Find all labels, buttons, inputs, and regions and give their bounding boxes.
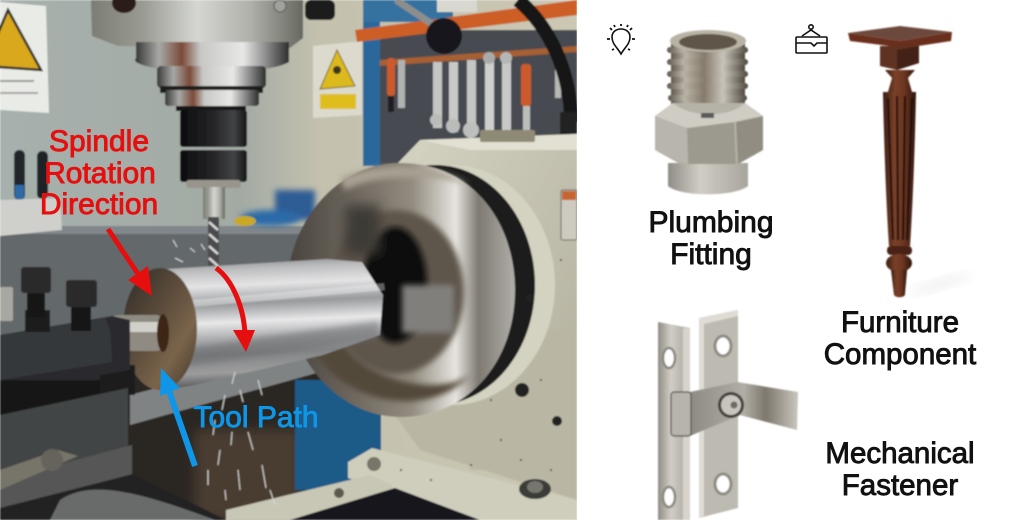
label: furniture component [824,306,976,371]
label: mechanical fastener: Fastener [842,469,958,502]
label: plumbing fitting [648,206,774,271]
icon: box with hook [796,25,827,53]
product: plumbing fitting [655,30,763,194]
label: spindle rotation direction: Rotation [44,157,156,190]
product: mechanical hinge fastener [658,310,798,520]
label: plumbing fitting: Fitting [670,238,752,271]
label: furniture component: Component [824,338,976,371]
arrow: red pointer to end face [108,229,152,296]
label: spindle rotation direction: Spindle [49,125,149,158]
label: tool path: Tool Path [193,401,319,434]
panel: lathe machining photo [0,0,577,520]
photo background and machine [0,0,577,520]
label: spindle rotation direction: Direction [40,188,158,221]
product: furniture leg [848,26,972,298]
icon: light bulb [607,24,635,54]
label: mechanical fastener: Mechanical [825,437,975,470]
label: spindle rotation direction [42,129,157,215]
arrow: red rotation arc [216,268,255,352]
label: furniture component: Furniture [841,306,959,339]
label: plumbing fitting: Plumbing [648,206,774,239]
label: mechanical fastener [825,437,975,502]
arrow: blue tool path [160,368,195,466]
